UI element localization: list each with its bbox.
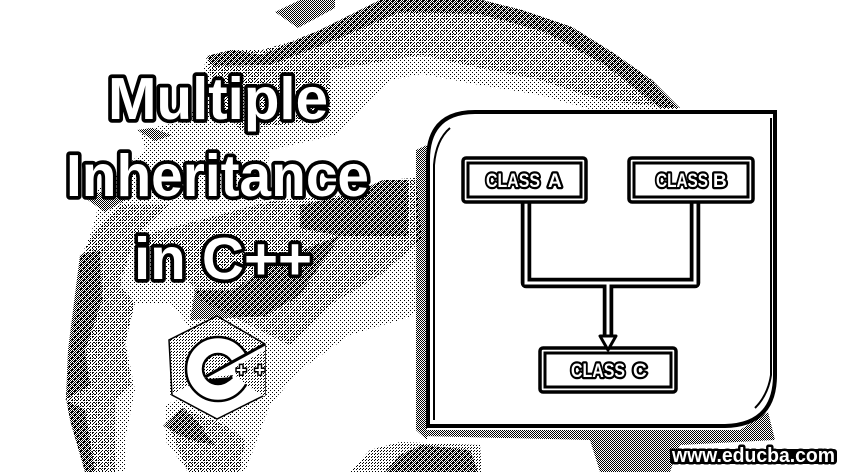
label: class C: CLASS	[571, 361, 625, 382]
arrow head	[600, 336, 616, 350]
box: class A	[463, 158, 586, 202]
label: class B: B	[713, 171, 727, 192]
connector: class A and B to class C	[526, 200, 695, 342]
box: class C	[540, 348, 676, 392]
icon: C++ logo	[169, 316, 265, 419]
label: class A: A	[548, 171, 562, 192]
title	[66, 66, 369, 292]
label: ++: ++	[236, 360, 265, 380]
title: in C++	[134, 226, 312, 292]
watermark: www.educba.com	[671, 445, 835, 467]
title: Multiple	[108, 66, 328, 132]
label: class C: C	[633, 361, 647, 382]
panel: class diagram	[428, 112, 775, 426]
label: class A: CLASS	[486, 171, 540, 192]
box: class B	[629, 158, 753, 202]
label: class B: CLASS	[656, 171, 708, 192]
title: Inheritance	[66, 143, 369, 209]
